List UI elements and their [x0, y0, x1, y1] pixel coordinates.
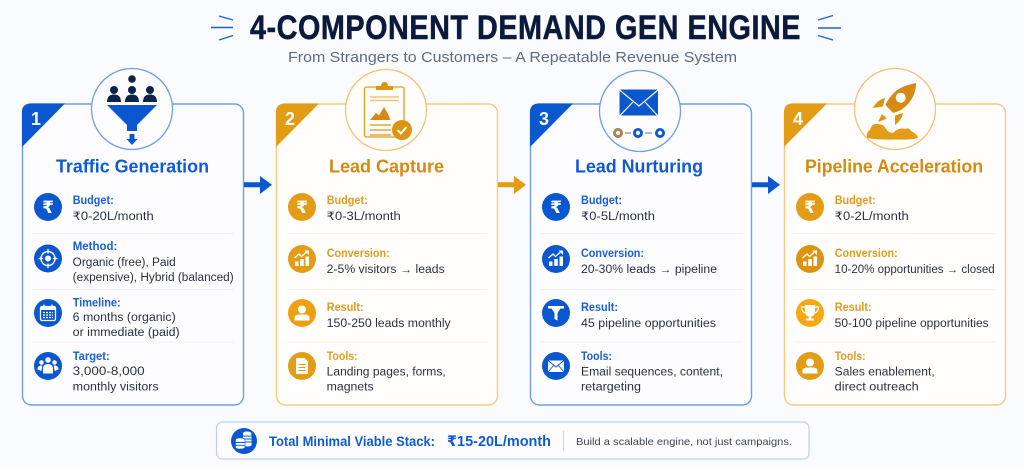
row: budget: Budget:	[581, 195, 622, 207]
card outline	[530, 104, 752, 405]
row: result: Result:	[835, 302, 872, 314]
row: result	[796, 299, 989, 330]
title decoration left	[211, 16, 233, 40]
row: tools	[288, 351, 446, 394]
arrow: nurturing to acceleration	[752, 176, 780, 194]
row: conversion: Conversion:	[581, 248, 644, 260]
row: tools: magnets	[327, 382, 374, 394]
row: timeline: 6 months (organic)	[73, 312, 176, 324]
icon: rocket	[854, 68, 936, 150]
row: tools	[542, 351, 723, 394]
number badge 3: 3	[539, 109, 549, 129]
number badge 1: 1	[31, 109, 41, 129]
row: target	[34, 351, 159, 394]
row: budget: ₹0-3L/month	[327, 211, 401, 223]
row: target: monthly visitors	[73, 382, 159, 394]
row: result: Result:	[581, 302, 618, 314]
panel: pipeline acceleration	[784, 68, 1006, 405]
card outline	[276, 104, 498, 405]
arrow: capture to nurturing	[498, 176, 526, 194]
number badge 3	[530, 104, 573, 147]
row: budget: Budget:	[835, 195, 876, 207]
row: conversion	[796, 245, 995, 276]
row: budget	[288, 193, 401, 223]
row: result	[542, 299, 716, 330]
row: conversion: 2-5% visitors → leads	[327, 264, 445, 276]
row: budget: ₹	[804, 198, 816, 217]
total label: Total Minimal Viable Stack:	[269, 434, 435, 449]
number badge 2: 2	[285, 109, 295, 129]
tagline: Build a scalable engine, not just campaigns.	[576, 436, 792, 448]
card outline	[22, 104, 244, 405]
total value: ₹15-20L/month	[447, 434, 551, 450]
row: result: 45 pipeline opportunities	[581, 318, 716, 330]
row: target: Target:	[73, 351, 110, 363]
panel: lead nurturing	[530, 70, 752, 405]
row: budget: ₹0-5L/month	[581, 211, 655, 223]
row: tools: Landing pages, forms,	[327, 366, 446, 378]
row: method: Method:	[73, 241, 117, 253]
card outline	[784, 104, 1006, 405]
row: target: 3,000-8,000	[73, 366, 145, 378]
row: tools: Tools:	[327, 351, 358, 363]
row: budget: ₹	[42, 198, 54, 217]
icon: clipboard	[346, 70, 426, 150]
number badge 2	[276, 104, 319, 147]
row: conversion	[288, 245, 445, 276]
row: conversion	[542, 245, 717, 276]
summary bar	[216, 422, 809, 459]
panel: traffic generation	[22, 68, 244, 405]
row: conversion: Conversion:	[327, 248, 390, 260]
icon: coin stacks	[231, 428, 257, 454]
row: budget	[34, 193, 154, 223]
row: result: 150-250 leads monthly	[327, 318, 451, 330]
row: budget: Budget:	[73, 195, 114, 207]
row: budget: ₹0-2L/month	[835, 211, 909, 223]
row: tools: retargeting	[581, 382, 641, 394]
number badge 4	[784, 104, 827, 147]
row: conversion: Conversion:	[835, 248, 898, 260]
row: conversion: 20-30% leads → pipeline	[581, 264, 717, 276]
row: method	[34, 241, 234, 284]
row: result	[288, 299, 451, 330]
icon: envelope and sequence	[600, 70, 680, 152]
row: conversion: 10-20% opportunities → closed	[835, 264, 995, 276]
row: budget: Budget:	[327, 195, 368, 207]
title decoration right	[818, 16, 841, 40]
row: tools: Tools:	[581, 351, 612, 363]
arrow: traffic to capture	[244, 176, 272, 194]
heading: Pipeline Acceleration	[805, 156, 983, 176]
row: budget	[542, 193, 655, 223]
row: budget: ₹0-20L/month	[73, 211, 154, 223]
row: budget: ₹	[296, 198, 308, 217]
row: tools	[796, 351, 935, 394]
number badge 1	[22, 104, 65, 147]
row: timeline: or immediate (paid)	[73, 327, 180, 339]
number badge 4: 4	[793, 109, 803, 129]
row: result: 50-100 pipeline opportunities	[835, 318, 989, 330]
row: result: Result:	[327, 302, 364, 314]
panel: lead capture	[276, 70, 498, 405]
icon: funnel with people	[92, 68, 172, 150]
row: method: (expensive), Hybrid (balanced)	[73, 272, 234, 284]
title: 4-COMPONENT DEMAND GEN ENGINE	[250, 9, 801, 47]
row: timeline	[34, 298, 180, 339]
row: tools: Tools:	[835, 351, 866, 363]
heading: Traffic Generation	[56, 156, 209, 176]
row: method: Organic (free), Paid	[73, 257, 176, 269]
row: budget	[796, 193, 909, 223]
row: tools: Email sequences, content,	[581, 366, 723, 378]
row: tools: direct outreach	[835, 382, 919, 394]
heading: Lead Capture	[329, 156, 444, 176]
heading: Lead Nurturing	[575, 156, 703, 176]
row: tools: Sales enablement,	[835, 366, 935, 378]
row: budget: ₹	[550, 198, 562, 217]
row: timeline: Timeline:	[73, 298, 121, 310]
subtitle: From Strangers to Customers – A Repeatable Revenue System	[288, 49, 737, 66]
